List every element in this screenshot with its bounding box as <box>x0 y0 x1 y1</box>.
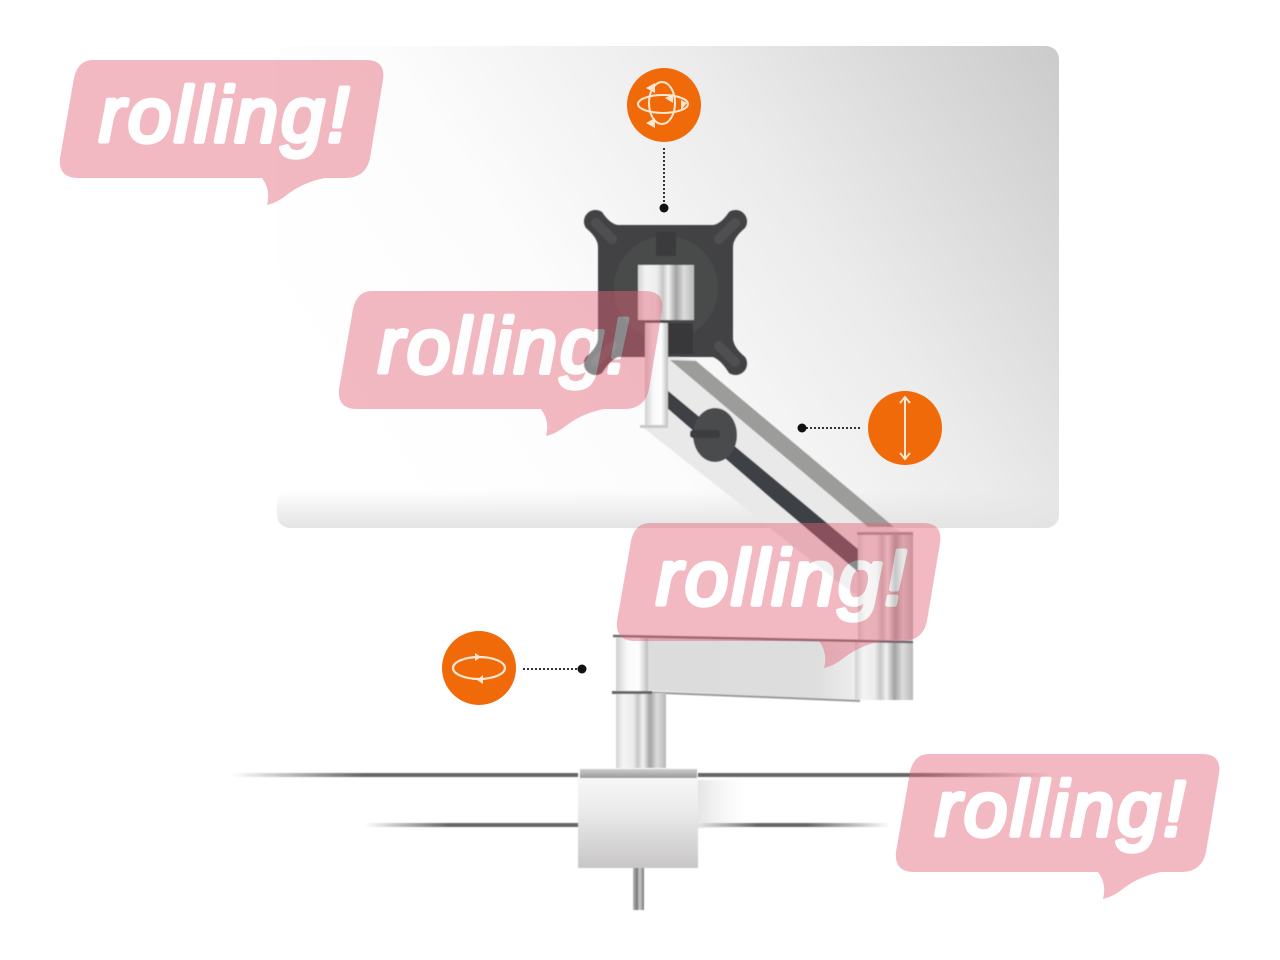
watermark bubble 4: rolling! <box>935 764 1185 852</box>
watermark bubble 1: rolling! <box>99 70 349 158</box>
horizontal arm <box>613 636 913 701</box>
right joint column <box>857 532 913 640</box>
callout: swivel icon left <box>442 631 586 705</box>
desk clamp <box>578 768 698 910</box>
watermark bubble 1 <box>60 60 383 205</box>
watermark bubble 2 <box>339 291 662 436</box>
desk edge lines <box>232 773 1052 828</box>
background panel <box>277 46 1059 528</box>
upper diagonal arm <box>640 355 912 596</box>
callout: height icon right <box>798 391 942 465</box>
monitor arm <box>578 210 913 910</box>
callout: rotate icon top <box>627 68 701 212</box>
knob <box>690 408 737 462</box>
watermark bubble 3 <box>617 523 940 668</box>
watermark bubble 4 <box>896 754 1219 899</box>
watermark bubble 3: rolling! <box>656 534 906 622</box>
lower post <box>612 691 666 769</box>
mounting plate <box>584 210 747 375</box>
vertical posts <box>637 265 694 428</box>
watermark bubble 2: rolling! <box>378 302 628 390</box>
